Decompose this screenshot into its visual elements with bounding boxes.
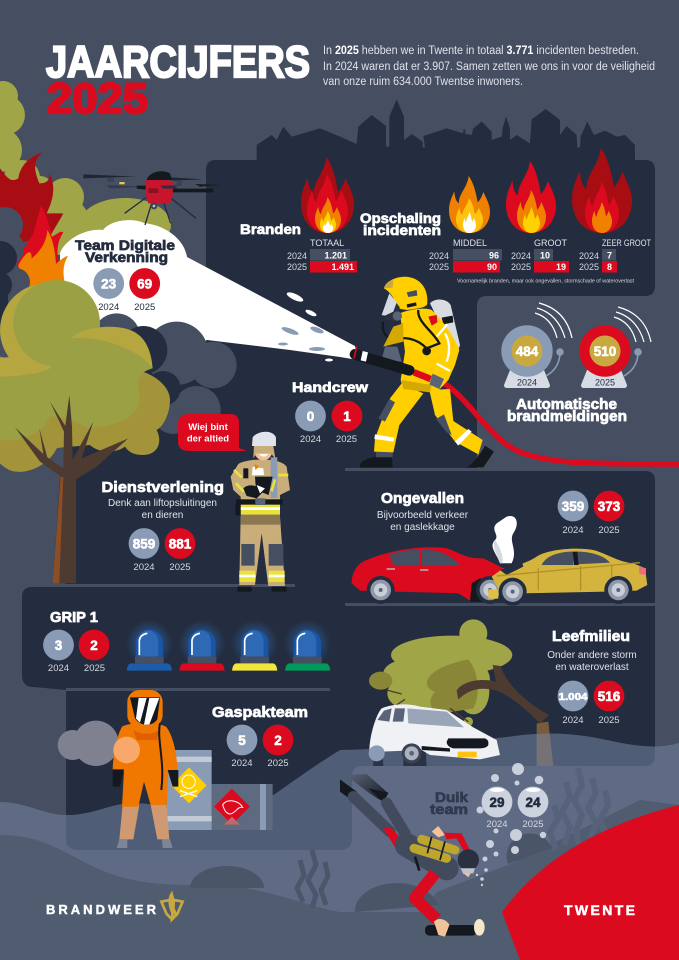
panel: gaspakteam: 2 [274, 733, 282, 748]
fire on the left [0, 152, 68, 293]
illustration: white car [369, 704, 500, 766]
skyline silhouette [257, 99, 635, 167]
panel: gaspakteam: Gaspakteam [212, 704, 308, 721]
panel: gaspakteam: 5 [238, 733, 246, 748]
panel: opschaling incidenten: 96 [489, 250, 499, 260]
icon: flame zeer groot [572, 148, 632, 233]
callout: wiej bint der altied [178, 414, 247, 451]
panel: team digitale verkenning: 69 [137, 276, 152, 292]
panel: grip 1 [43, 609, 331, 674]
title [46, 38, 310, 123]
panel: dienstverlening: 859 [133, 536, 155, 552]
divider lines [60, 468, 655, 691]
air bubbles [476, 763, 546, 886]
intro text: In 2024 waren dat er 3.907. Samen zetten we ons in voor de veiligheid [323, 61, 655, 73]
sea plants and coral [190, 768, 608, 912]
panel: branden [240, 157, 357, 272]
panel: leefmilieu: Leefmilieu [552, 629, 630, 645]
icon: alarm bell 2025: 510 [594, 344, 616, 359]
intro text: van onze ruim 634.000 Twentse inwoners. [323, 76, 523, 88]
panel: ongevallen: 373 [598, 499, 621, 514]
panel: opschaling incidenten: 19 [556, 262, 566, 272]
drone [83, 171, 220, 225]
panel: grip 1: 2025 [84, 663, 105, 674]
diver [340, 774, 485, 937]
panel: team digitale verkenning: 2025 [134, 302, 155, 313]
right smoke [93, 313, 237, 434]
panel: dienstverlening: 2025 [169, 562, 191, 573]
icon: brandweer shield [161, 894, 183, 919]
icon: flame totaal [301, 157, 354, 233]
panel: dienstverlening: en dieren [142, 510, 183, 521]
illustration: gas cloud and hazmat suit [58, 690, 178, 848]
panel: team digitale verkenning: 23 [101, 276, 117, 292]
panel: ongevallen [352, 490, 647, 606]
panel: opschaling incidenten: Opschaling [360, 210, 441, 226]
panel: dienstverlening: 2024 [133, 562, 155, 573]
panel: automatische brandmeldingen: brandmeldingen [507, 409, 627, 425]
panel: leefmilieu: en wateroverlast [555, 662, 629, 673]
callout: wiej bint der altied: der altied [187, 434, 229, 444]
illustration: crashed cars [352, 516, 647, 606]
panel: duik team [430, 787, 548, 830]
panel: branden: 1.491 [331, 262, 354, 272]
water waves [0, 733, 679, 960]
panel: handcrew: Handcrew [292, 379, 368, 395]
logo: brandweer: BRANDWEER [46, 902, 157, 917]
panel: dienstverlening: Denk aan liftopsluitingen [108, 498, 217, 509]
icon: flame groot [506, 161, 556, 233]
firefighter with cat [231, 432, 290, 592]
icon: alarm bell 2024 [501, 303, 572, 388]
panel: gaspakteam: 2025 [267, 758, 289, 769]
sea ground [0, 800, 679, 960]
panel: opschaling incidenten: GROOT [534, 238, 568, 248]
icon: alarm bell 2025 [579, 307, 651, 388]
panel: opschaling incidenten: 2025 [429, 262, 449, 272]
panel: handcrew [292, 379, 368, 445]
panel: opschaling incidenten: 2025 [511, 262, 531, 272]
panel: gaspakteam: 2024 [231, 758, 253, 769]
panel: grip 1: 2 [90, 638, 98, 653]
panel: automatische brandmeldingen: Automatische [516, 397, 617, 413]
water beam and team cloud [60, 220, 358, 370]
panel: team digitale verkenning: Team Digitale [75, 237, 175, 253]
panel: branden: 2025 [287, 262, 307, 272]
panel: opschaling incidenten: 7 [607, 250, 612, 260]
panel: opschaling incidenten: 8 [607, 262, 612, 272]
panel: handcrew: 2024 [300, 434, 321, 445]
panel: handcrew: 1 [343, 409, 351, 424]
callout: wiej bint der altied: Wiej bint [188, 422, 229, 433]
panel: handcrew: 0 [307, 409, 314, 424]
panel: duik team: team [430, 801, 468, 817]
panel: branden: TOTAAL [310, 238, 344, 248]
panel: ongevallen: 2025 [598, 525, 620, 536]
left smoke [0, 207, 30, 330]
panel: leefmilieu: 516 [598, 689, 621, 704]
panel: opschaling incidenten: 2024 [429, 251, 449, 261]
intro text [323, 45, 655, 88]
intro text: In 2025 hebben we in Twente in totaal 3.771 incidenten bestreden. [323, 45, 639, 57]
olive trees behind fire [0, 81, 171, 255]
panel: ongevallen: Bijvoorbeeld verkeer [377, 510, 469, 521]
panel: leefmilieu: 2024 [562, 715, 584, 726]
hose [413, 372, 679, 464]
panel: branden: 1.201 [324, 250, 347, 260]
panel: ongevallen: en gaslekkage [390, 522, 455, 533]
panel: branden: Branden [240, 221, 301, 237]
panel: grip 1: GRIP 1 [50, 609, 98, 626]
icon: blue beacons [126, 620, 331, 671]
panel: opschaling incidenten: MIDDEL [453, 238, 487, 248]
panel: dienstverlening [102, 479, 224, 573]
panel: ongevallen: 359 [562, 499, 584, 514]
big tree [0, 280, 170, 583]
panel: opschaling incidenten: 90 [487, 262, 497, 272]
title: JAARCIJFERS [46, 38, 310, 87]
firefighter with hose [354, 277, 494, 467]
title: 2025 [47, 75, 148, 123]
panel: grip 1: 3 [55, 638, 63, 653]
panel: dienstverlening: 881 [169, 536, 192, 552]
panel: opschaling incidenten: 10 [540, 250, 550, 260]
panel: handcrew: 2025 [336, 434, 357, 445]
panel: gaspakteam [212, 704, 308, 769]
panel: duik team: 2025 [522, 819, 544, 830]
panel: branden: 2024 [287, 251, 307, 261]
dark panels background [22, 160, 655, 850]
panel: duik team: 29 [489, 795, 505, 810]
panel: automatische brandmeldingen [501, 303, 651, 425]
panel: grip 1: 2024 [48, 663, 69, 674]
panel: team digitale verkenning [75, 237, 175, 313]
panel: leefmilieu: 2025 [598, 715, 620, 726]
panel: opschaling incidenten: 2024 [579, 251, 599, 261]
logo: brandweer [46, 894, 183, 919]
logo: twente: TWENTE [564, 902, 635, 918]
panel: opschaling incidenten: incidenten [363, 222, 441, 238]
icon: alarm bell 2024: 484 [516, 344, 539, 359]
panel: duik team: 24 [525, 795, 541, 810]
panel: opschaling incidenten: 2025 [579, 262, 599, 272]
panel: ongevallen: Ongevallen [381, 490, 464, 507]
spray droplets [278, 290, 333, 362]
panel: leefmilieu: 1.004 [558, 691, 588, 703]
panel: dienstverlening: Dienstverlening [102, 479, 224, 496]
panel: duik team: 2024 [486, 819, 508, 830]
icon: alarm bell 2025: 2025 [595, 378, 615, 388]
panel: opschaling incidenten: ZEER GROOT [602, 238, 651, 248]
illustration: fallen tree [369, 619, 553, 766]
panel: team digitale verkenning: 2024 [98, 302, 119, 313]
panel: opschaling incidenten: Voornamelijk branden, maar ook ongevallen, stormschade of wateroverlast [457, 278, 635, 284]
panel: opschaling incidenten: 2024 [511, 251, 531, 261]
panel: leefmilieu: Onder andere storm [547, 650, 637, 661]
panel: opschaling incidenten [360, 148, 651, 284]
panel: duik team: Duik [435, 789, 468, 805]
panel: ongevallen: 2024 [562, 525, 584, 536]
panel: leefmilieu [547, 629, 637, 726]
red corner panel [502, 805, 679, 960]
panel: team digitale verkenning: Verkenning [85, 249, 168, 265]
illustration: hazmat drums [167, 750, 273, 830]
icon: alarm bell 2024: 2024 [517, 378, 537, 388]
icon: flame middel [449, 176, 490, 233]
